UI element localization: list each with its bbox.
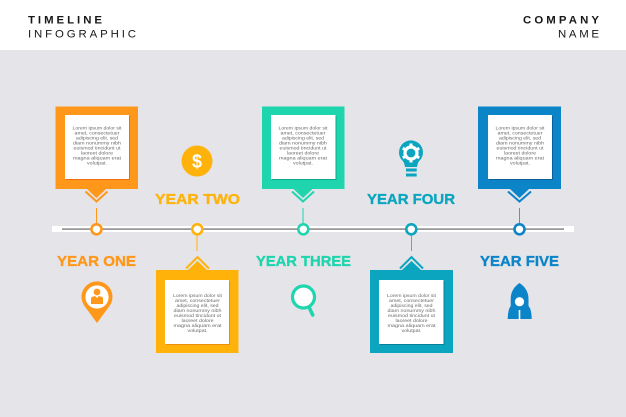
- timeline bar: [52, 226, 574, 232]
- panel: year three card: volutpat.: [293, 160, 313, 165]
- panel: year five card: amet, consectetuer: [498, 130, 543, 135]
- company name: NAME: [558, 28, 599, 40]
- panel: year five card: euismod tincidunt ut: [496, 145, 544, 150]
- panel: year three card: diam nonummy nibh: [279, 140, 328, 145]
- connector: year two: [192, 224, 202, 251]
- panel: year five card: Lorem ipsum dolor sit: [496, 125, 545, 130]
- panel: year four card: [370, 257, 453, 353]
- panel: year three card: [262, 106, 344, 202]
- connector: year three: [298, 208, 308, 234]
- panel: year three card: laoreet dolore: [287, 150, 320, 155]
- company name: [523, 14, 599, 40]
- panel: year four card: volutpat.: [402, 328, 422, 333]
- panel: year one card: euismod tincidunt ut: [74, 145, 121, 150]
- panel: year one card: volutpat.: [87, 160, 107, 165]
- panel: year four card: euismod tincidunt ut: [388, 313, 436, 318]
- connector: year one: [92, 208, 102, 234]
- heading: year two: YEAR TWO: [155, 191, 240, 208]
- panel: year five card: laoreet dolore: [504, 150, 537, 155]
- company name: COMPANY: [523, 14, 599, 26]
- connector: year four: [406, 224, 416, 251]
- panel: year one card: adipiscing elit, sed: [76, 135, 119, 140]
- panel: year five card: magna aliquam erat: [496, 155, 545, 160]
- icon: magnifying glass: [292, 286, 314, 315]
- panel: year two card: volutpat.: [188, 328, 208, 333]
- panel: year one card: diam nonummy nibh: [73, 140, 122, 145]
- panel: year one card: amet, consectetuer: [74, 130, 120, 135]
- header band: [0, 0, 626, 50]
- title: [28, 14, 136, 40]
- icon: light bulb with gear: [399, 140, 423, 176]
- panel: year two card: magna aliquam erat: [174, 323, 222, 328]
- panel: year four card: magna aliquam erat: [388, 323, 436, 328]
- title: TIMELINE: [28, 14, 102, 26]
- panel: year three card: magna aliquam erat: [279, 155, 328, 160]
- panel: year one card: laoreet dolore: [81, 150, 114, 155]
- heading: year one: YEAR ONE: [57, 253, 136, 270]
- panel: year five card: [478, 106, 561, 202]
- icon: dollar coin: [182, 146, 212, 176]
- panel: year five card: diam nonummy nibh: [496, 140, 545, 145]
- panel: year three card: amet, consectetuer: [280, 130, 326, 135]
- panel: year four card: adipiscing elit, sed: [390, 303, 433, 308]
- panel: year three card: euismod tincidunt ut: [280, 145, 327, 150]
- panel: year four card: diam nonummy nibh: [388, 308, 436, 313]
- panel: year one card: Lorem ipsum dolor sit: [72, 125, 122, 130]
- panel: year two card: euismod tincidunt ut: [174, 313, 222, 318]
- heading: year five: YEAR FIVE: [480, 253, 559, 270]
- panel: year five card: volutpat.: [510, 160, 530, 165]
- panel: year one card: magna aliquam erat: [73, 155, 122, 160]
- connector: year five: [514, 208, 524, 234]
- panel: year four card: amet, consectetuer: [389, 298, 435, 303]
- panel: year two card: adipiscing elit, sed: [176, 303, 219, 308]
- panel: year two card: amet, consectetuer: [175, 298, 221, 303]
- icon: rocket: [508, 283, 532, 320]
- panel: year two card: Lorem ipsum dolor sit: [173, 293, 223, 298]
- icon: location pin with person: [81, 281, 112, 323]
- panel: year two card: [156, 257, 238, 353]
- panel: year five card: adipiscing elit, sed: [499, 135, 542, 140]
- panel: year two card: diam nonummy nibh: [174, 308, 222, 313]
- panel: year one card: [56, 106, 138, 202]
- panel: year two card: laoreet dolore: [182, 318, 214, 323]
- icon: dollar coin: $: [192, 152, 202, 172]
- panel: year four card: laoreet dolore: [396, 318, 428, 323]
- panel: year three card: adipiscing elit, sed: [282, 135, 325, 140]
- title: INFOGRAPHIC: [28, 28, 136, 40]
- panel: year four card: Lorem ipsum dolor sit: [387, 293, 437, 298]
- heading: year three: YEAR THREE: [256, 253, 351, 270]
- panel: year three card: Lorem ipsum dolor sit: [278, 125, 328, 130]
- heading: year four: YEAR FOUR: [367, 191, 455, 208]
